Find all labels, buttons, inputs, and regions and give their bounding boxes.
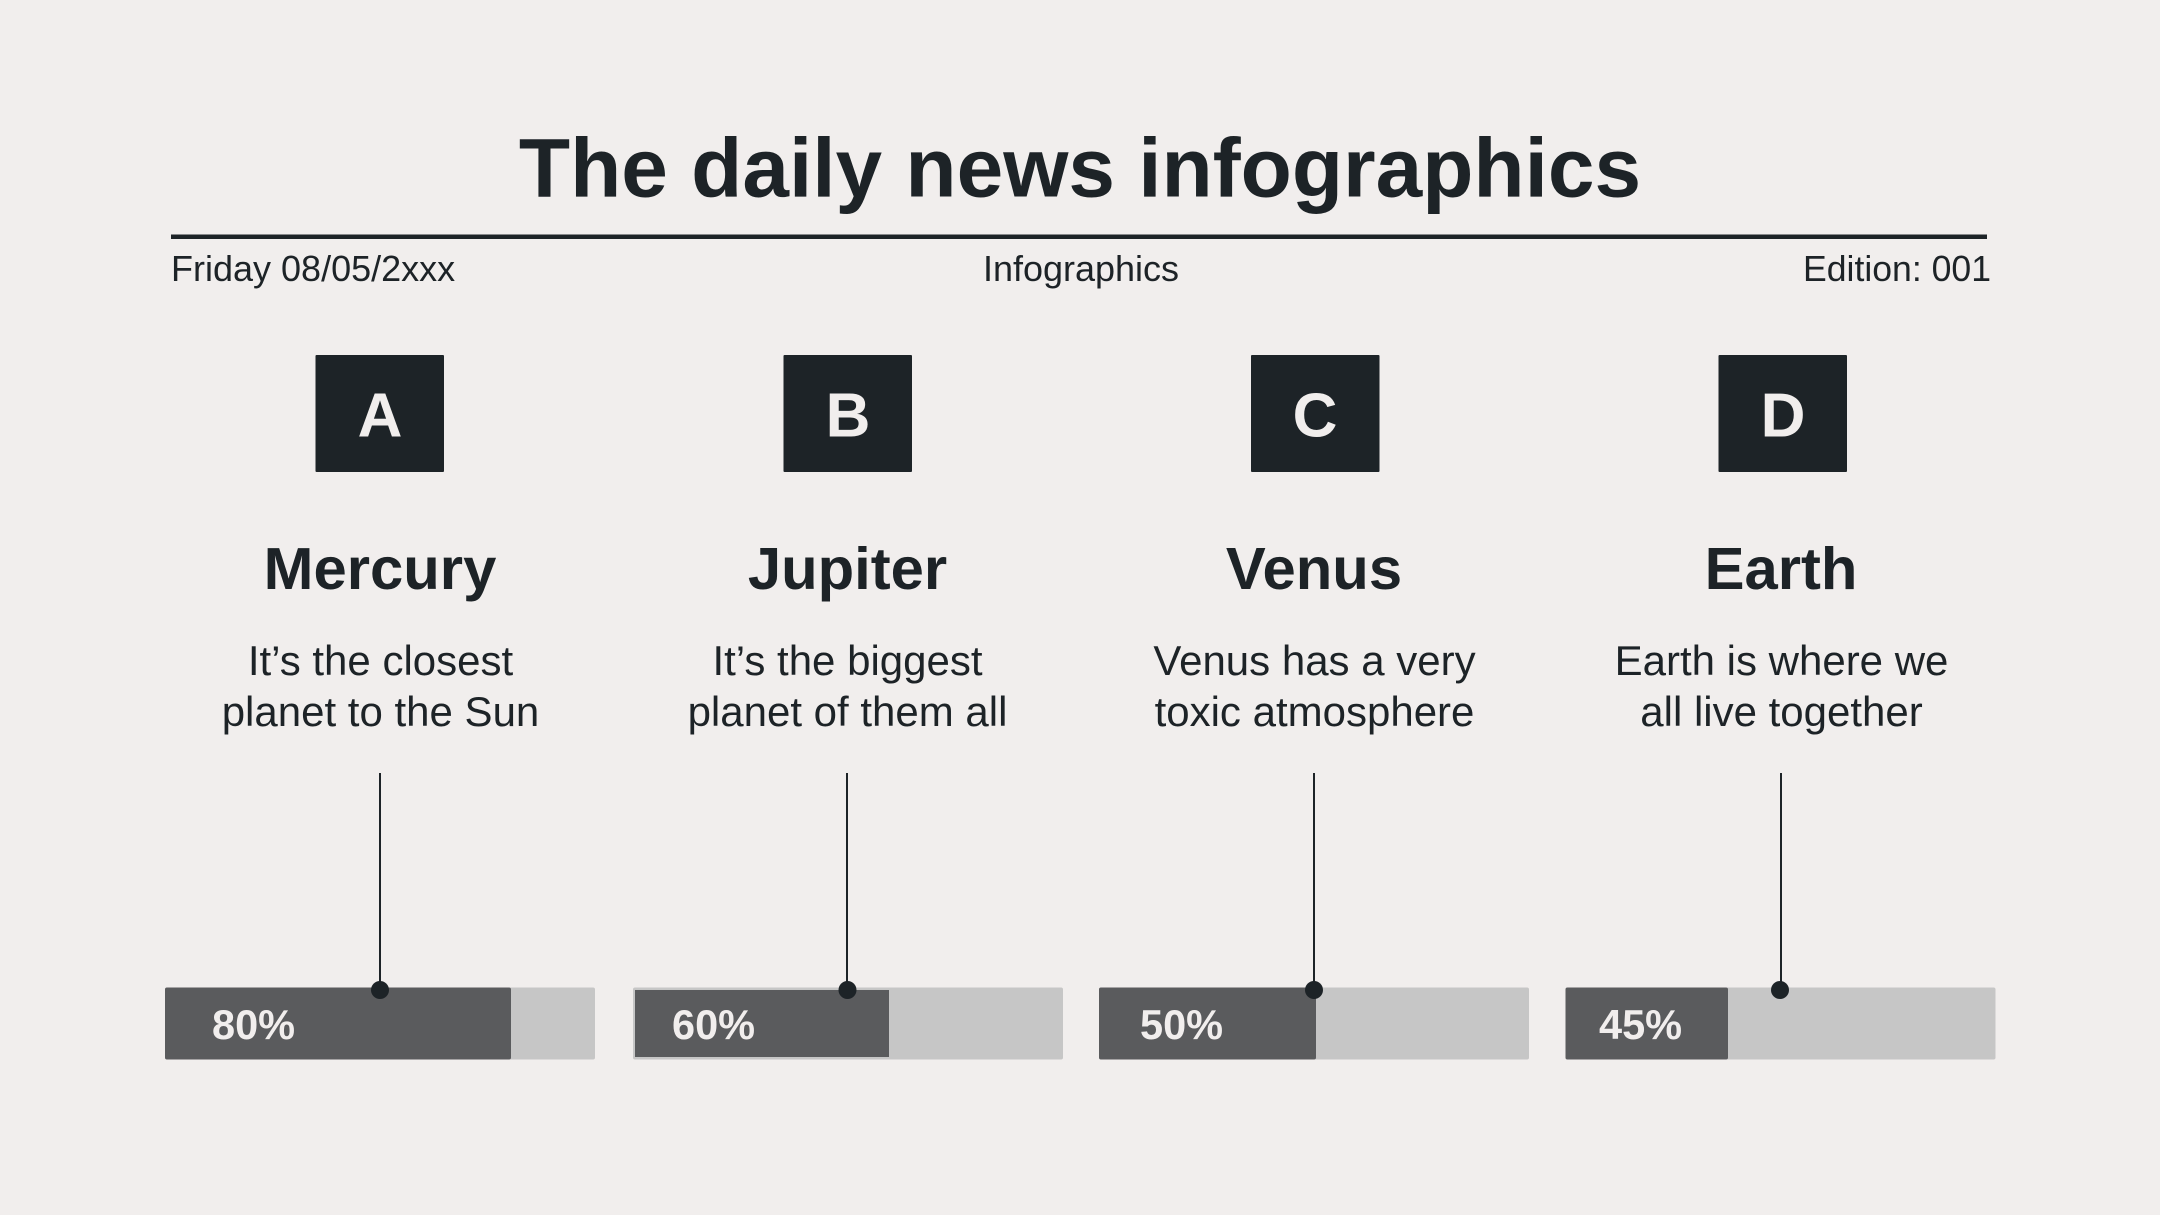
heading: Mercury: Mercury — [264, 535, 496, 602]
pointer line and dot — [1771, 773, 1789, 999]
icon: letter D — [1718, 355, 1847, 472]
text: Venus description: Venus has a very — [1153, 637, 1476, 684]
icon: letter C — [1251, 355, 1380, 472]
progress bar: 50% — [1099, 988, 1529, 1060]
icon: letter A: A — [358, 382, 402, 450]
panel: A Mercury — [165, 355, 595, 1060]
icon: letter A — [316, 355, 444, 472]
progress bar: 60% — [633, 988, 1063, 1060]
heading: Venus: Venus — [1226, 535, 1402, 602]
text: Mercury description: planet to the Sun — [222, 688, 539, 735]
progress bar: 80%: 80% — [212, 1001, 295, 1048]
pointer line and dot — [838, 773, 856, 999]
icon: letter D: D — [1761, 382, 1805, 450]
progress bar: 60%: 60% — [672, 1001, 755, 1048]
text: Venus description: toxic atmosphere — [1155, 688, 1474, 735]
header: section: Infographics — [983, 248, 1179, 289]
icon: letter B — [784, 355, 912, 472]
progress bar: 50%: 50% — [1140, 1001, 1223, 1048]
text: Earth description: all live together — [1640, 688, 1923, 735]
pointer line and dot — [371, 773, 389, 999]
text: Jupiter description: planet of them all — [688, 688, 1007, 735]
icon: letter B: B — [826, 382, 870, 450]
icon: letter C: C — [1293, 382, 1337, 450]
title: The daily news infographics — [519, 120, 1641, 214]
progress bar: 45% — [1566, 988, 1996, 1060]
pointer line and dot — [1305, 773, 1323, 999]
panel: D Earth — [1566, 355, 1996, 1060]
header: edition: Edition: 001 — [1803, 248, 1991, 289]
text: Jupiter description: It’s the biggest — [712, 637, 983, 684]
panel: C Venus — [1099, 355, 1529, 1060]
header: date: Friday 08/05/2xxx — [171, 248, 455, 289]
panel: B Jupiter — [633, 355, 1063, 1060]
text: Earth description: Earth is where we — [1615, 637, 1948, 684]
heading: Earth: Earth — [1705, 535, 1857, 602]
progress bar: 45%: 45% — [1599, 1001, 1682, 1048]
progress bar: 80% — [165, 988, 595, 1060]
text: Mercury description: It’s the closest — [248, 637, 514, 684]
heading: Jupiter: Jupiter — [748, 535, 947, 602]
